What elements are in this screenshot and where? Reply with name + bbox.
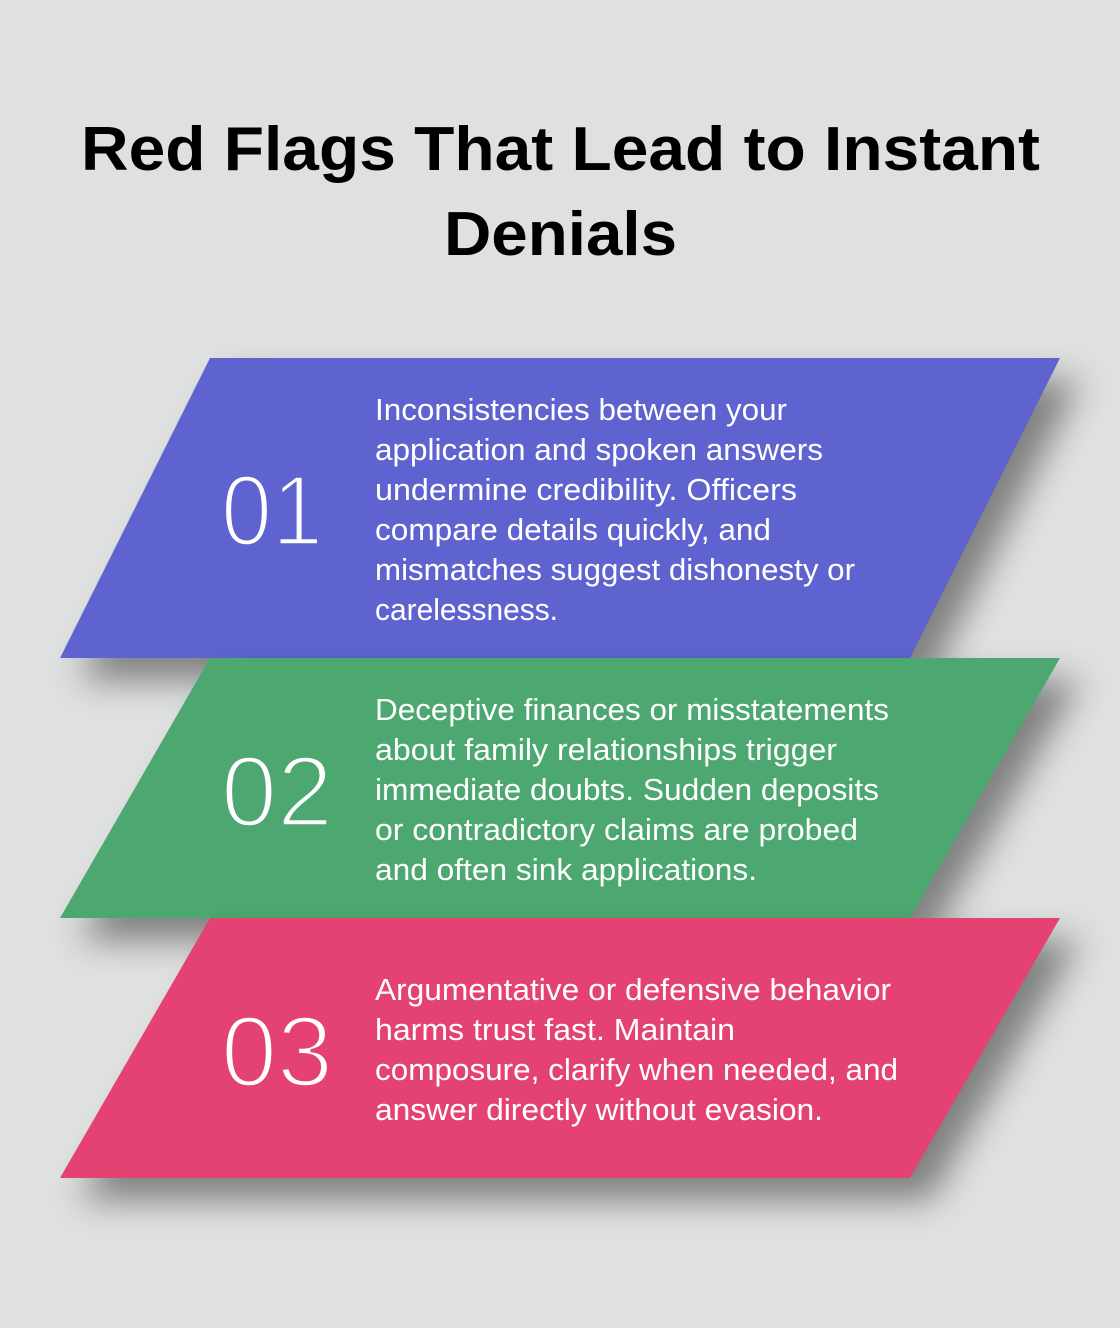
panel 3 text: answer directly without evasion. <box>375 1092 823 1127</box>
panel 1 text: mismatches suggest dishonesty or <box>375 552 855 587</box>
panel 2 text: or contradictory claims are probed <box>375 812 858 847</box>
panel 3 text: harms trust fast. Maintain <box>375 1012 735 1047</box>
panel 2 text: and often sink applications. <box>375 852 757 887</box>
panel 1 text: compare details quickly, and <box>375 512 771 547</box>
panel 3 number: 03 <box>221 996 333 1108</box>
panel 3 text: Argumentative or defensive behavior <box>375 972 891 1007</box>
panel 1 text: Inconsistencies between your <box>375 392 787 427</box>
title <box>81 115 1040 269</box>
panel 2 text <box>375 692 889 887</box>
panel 1 text: undermine credibility. Officers <box>375 472 797 507</box>
panel 1 text: carelessness. <box>375 592 558 627</box>
panel 3 text: composure, clarify when needed, and <box>375 1052 898 1087</box>
panel 2 text: about family relationships trigger <box>375 732 837 767</box>
panel 2 text: immediate doubts. Sudden deposits <box>375 772 879 807</box>
panel 1 number: 01 <box>221 455 323 567</box>
panel 2 text: Deceptive finances or misstatements <box>375 692 889 727</box>
title: Denials <box>444 200 677 269</box>
panel 2 shape: green parallelogram <box>60 658 1060 918</box>
panel 1 shape: blue parallelogram <box>60 358 1060 658</box>
panel 1 text: application and spoken answers <box>375 432 823 467</box>
panel 3 shape: pink parallelogram <box>60 918 1060 1178</box>
panel 2 number: 02 <box>221 736 333 848</box>
panel 1 text <box>375 392 855 627</box>
title: Red Flags That Lead to Instant <box>81 115 1040 184</box>
panel 3 text <box>375 972 898 1127</box>
